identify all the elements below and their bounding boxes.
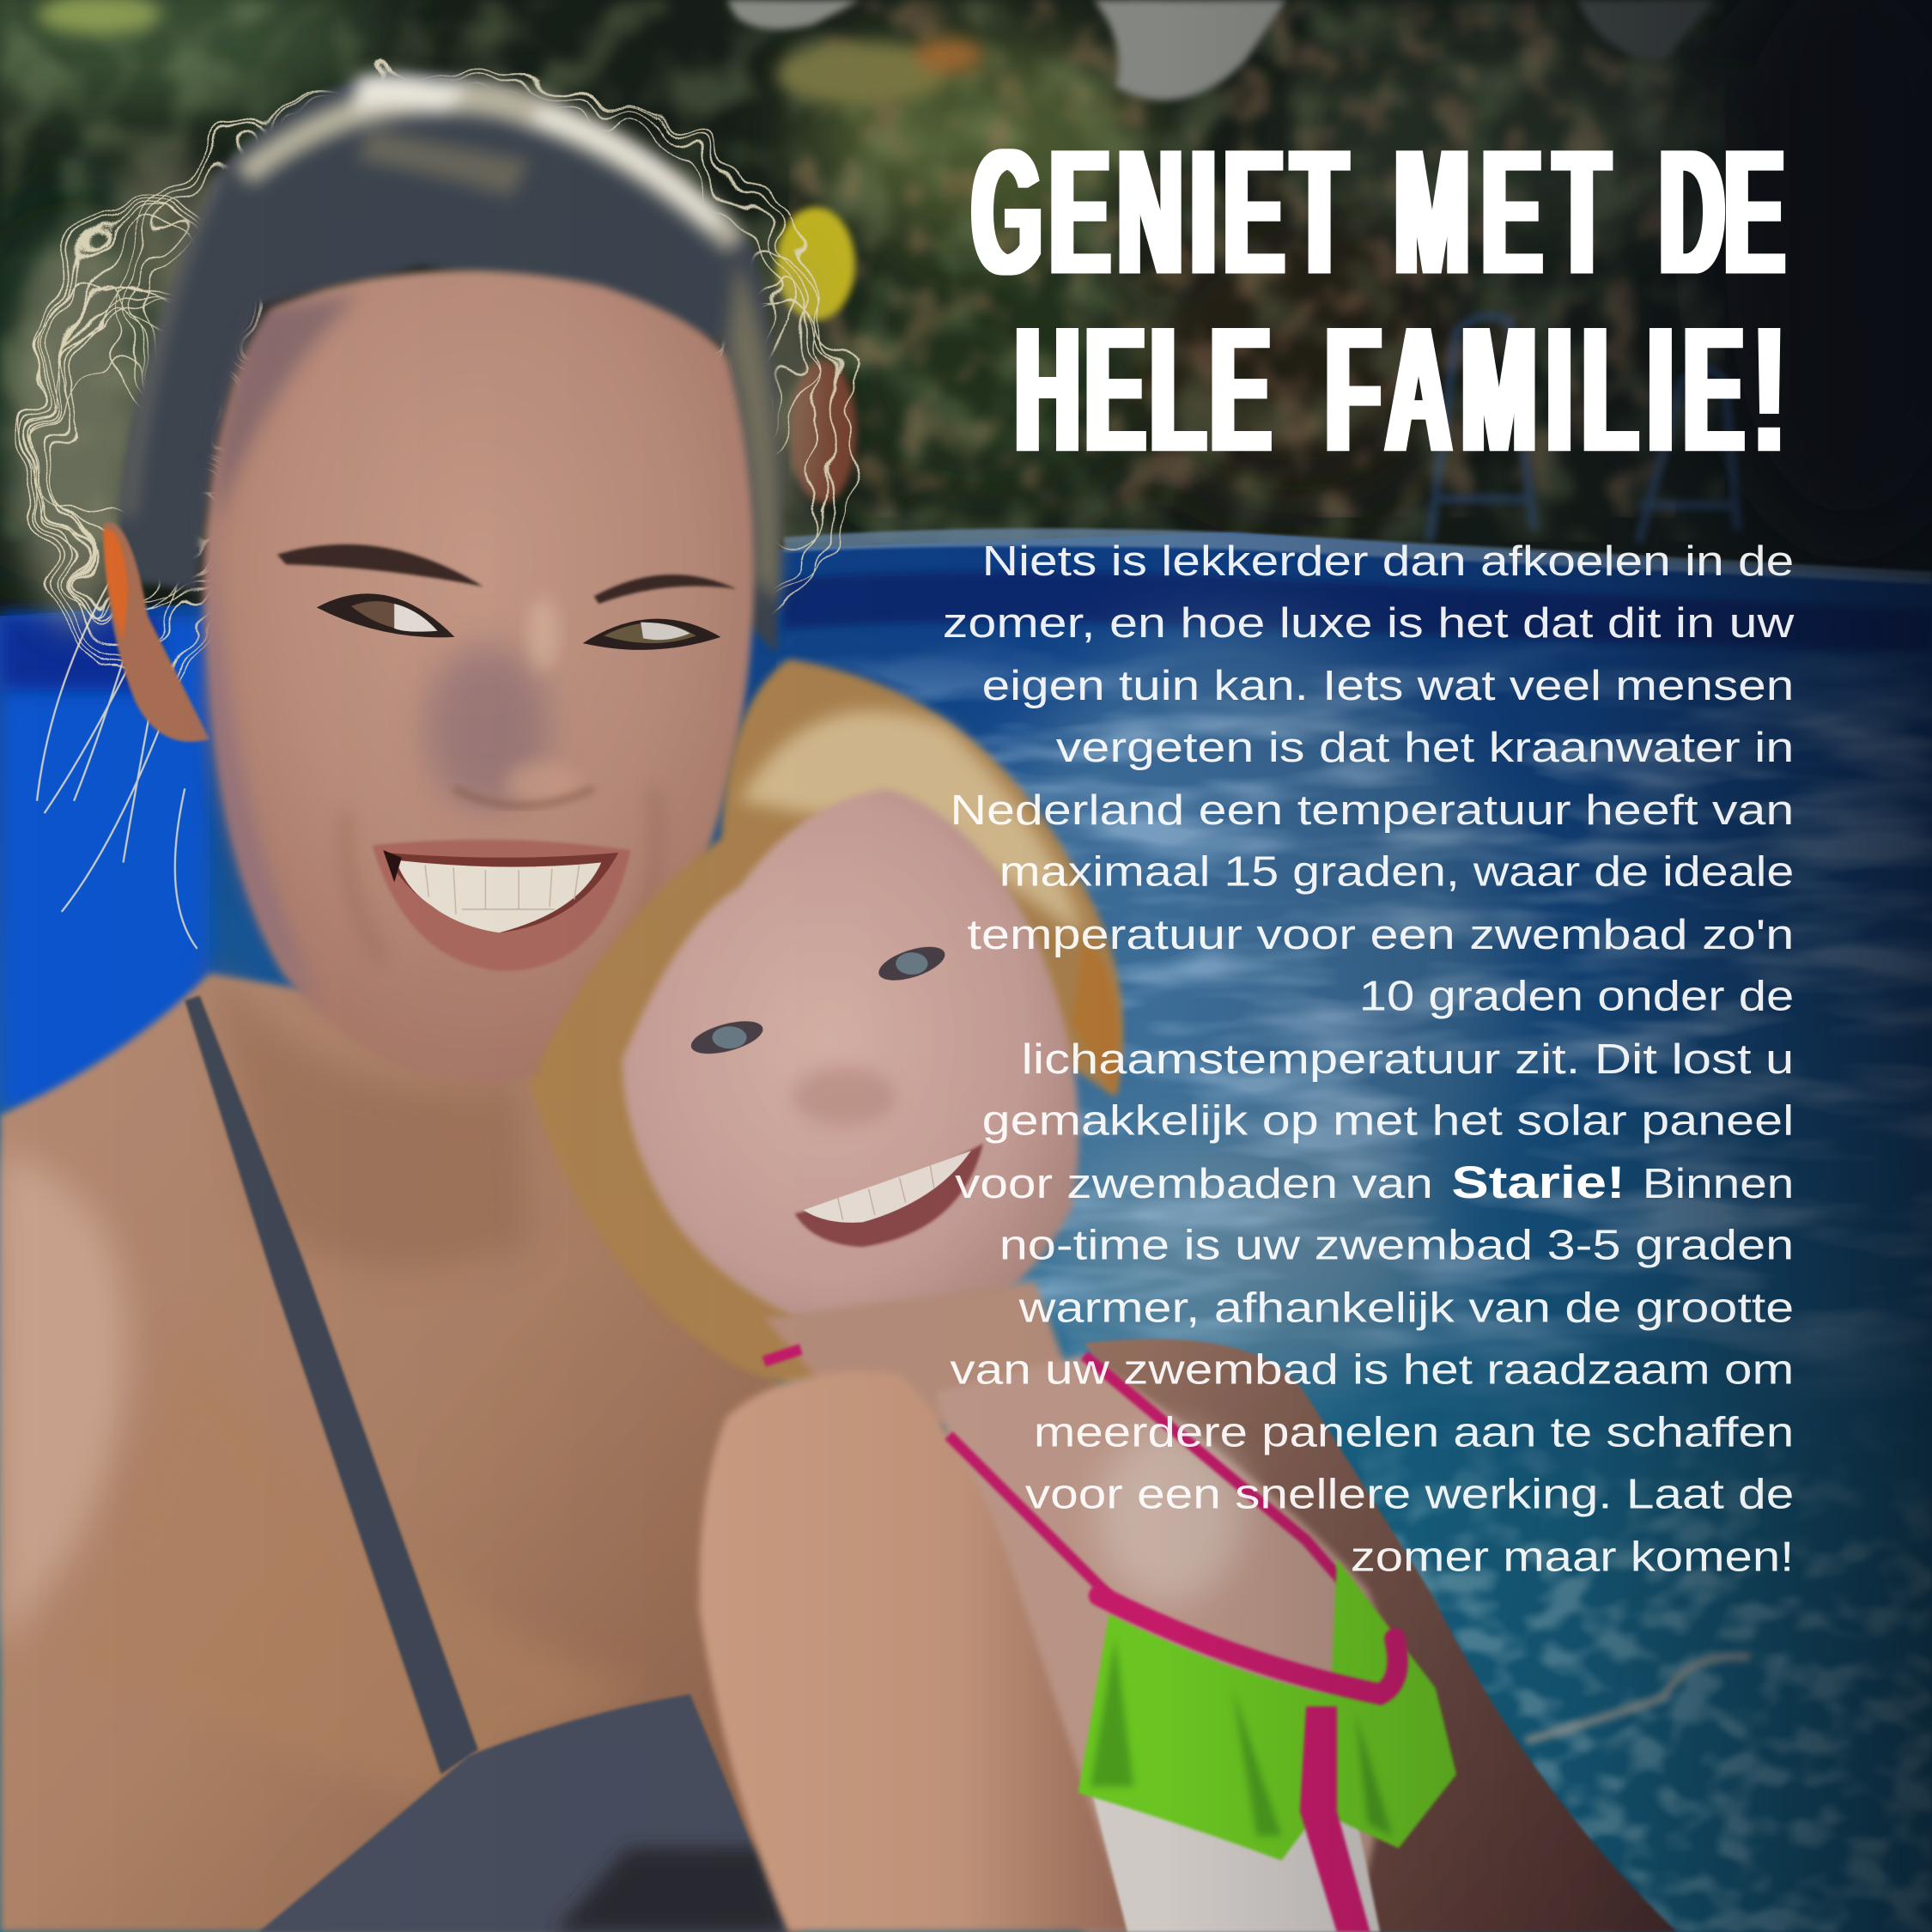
swimsuit white base — [1091, 1787, 1380, 1932]
body text: Binnen — [1643, 1161, 1794, 1207]
body text: Niets is lekkerder dan afkoelen in de — [982, 538, 1794, 585]
body text: 10 graden onder de — [1359, 974, 1794, 1020]
yellow ball — [776, 207, 855, 320]
child's torso — [937, 1355, 1405, 1932]
child's arm — [700, 1371, 1133, 1932]
child's face — [623, 788, 1079, 1346]
body text: Nederland een temperatuur heeft van — [950, 787, 1794, 834]
eyes — [317, 593, 720, 650]
body text: voor een snellere werking. Laat de — [1025, 1471, 1794, 1517]
body text — [943, 538, 1795, 1581]
body text: warmer, afhankelijk van de grootte — [1018, 1285, 1794, 1332]
child's nose — [793, 1067, 896, 1127]
smile lines — [345, 788, 658, 961]
hair back — [118, 74, 780, 653]
body text: temperatuur voor een zwembad zo'n — [967, 912, 1794, 958]
body text: eigen tuin kan. Iets wat veel mensen — [982, 663, 1794, 709]
body text: maximaal 15 graden, waar de ideale — [999, 849, 1794, 896]
child's smile — [795, 1144, 983, 1247]
body text: lichaamstemperatuur zit. Dit lost u — [1022, 1036, 1794, 1083]
body text: no-time is uw zwembad 3-5 graden — [999, 1223, 1794, 1269]
sunlit frizz haze — [12, 148, 816, 629]
swimsuit pink neckline — [1099, 1595, 1398, 1694]
body text: meerdere panelen aan te schaffen — [1034, 1410, 1794, 1456]
woman's bikini top — [258, 1694, 788, 1932]
child — [530, 659, 1456, 1932]
sunlit hair left side — [128, 173, 217, 518]
body text: zomer maar komen! — [1351, 1534, 1794, 1581]
smile — [372, 840, 631, 971]
body text: vergeten is dat het kraanwater in — [1056, 725, 1794, 771]
sunlit hair right side — [727, 258, 781, 604]
chest and shoulder — [0, 974, 801, 1932]
body text: voor zwembaden van — [955, 1161, 1433, 1207]
woman's halter strap — [185, 995, 478, 1774]
title: GENIET — [972, 112, 1346, 312]
body text: van uw zwembad is het raadzaam om — [950, 1346, 1794, 1393]
sunlit hair top — [234, 74, 747, 252]
child's eyes — [688, 940, 949, 1060]
title: HELE — [1015, 289, 1270, 489]
swimsuit straps — [764, 1349, 1392, 1638]
eyebrows — [277, 544, 737, 604]
neck shadow — [210, 961, 530, 1270]
foliage — [0, 0, 1932, 616]
loose strands by the neck — [37, 579, 197, 949]
sky patches — [727, 0, 1713, 100]
child's neck — [764, 1281, 1084, 1430]
body text: zomer, en hoe luxe is het dat dit in uw — [943, 600, 1795, 647]
pool ladder — [1430, 316, 1737, 542]
nose — [426, 598, 594, 808]
swimsuit green ruffles — [1078, 1558, 1456, 1861]
orange ball — [790, 360, 856, 502]
flyaway hair frizz — [22, 73, 854, 677]
body text: Starie! — [1451, 1157, 1625, 1208]
title: FAMILIE! — [1326, 289, 1784, 489]
ear — [104, 522, 210, 742]
woman — [0, 73, 854, 1932]
pool water — [0, 528, 1932, 1932]
title: MET — [1394, 112, 1609, 312]
child's hair — [530, 659, 1122, 1386]
woman's far arm behind child — [1084, 1339, 1677, 1932]
title — [972, 112, 1784, 489]
face — [204, 270, 754, 1084]
title: DE — [1660, 112, 1784, 312]
body text: gemakkelijk op met het solar paneel — [982, 1098, 1794, 1145]
